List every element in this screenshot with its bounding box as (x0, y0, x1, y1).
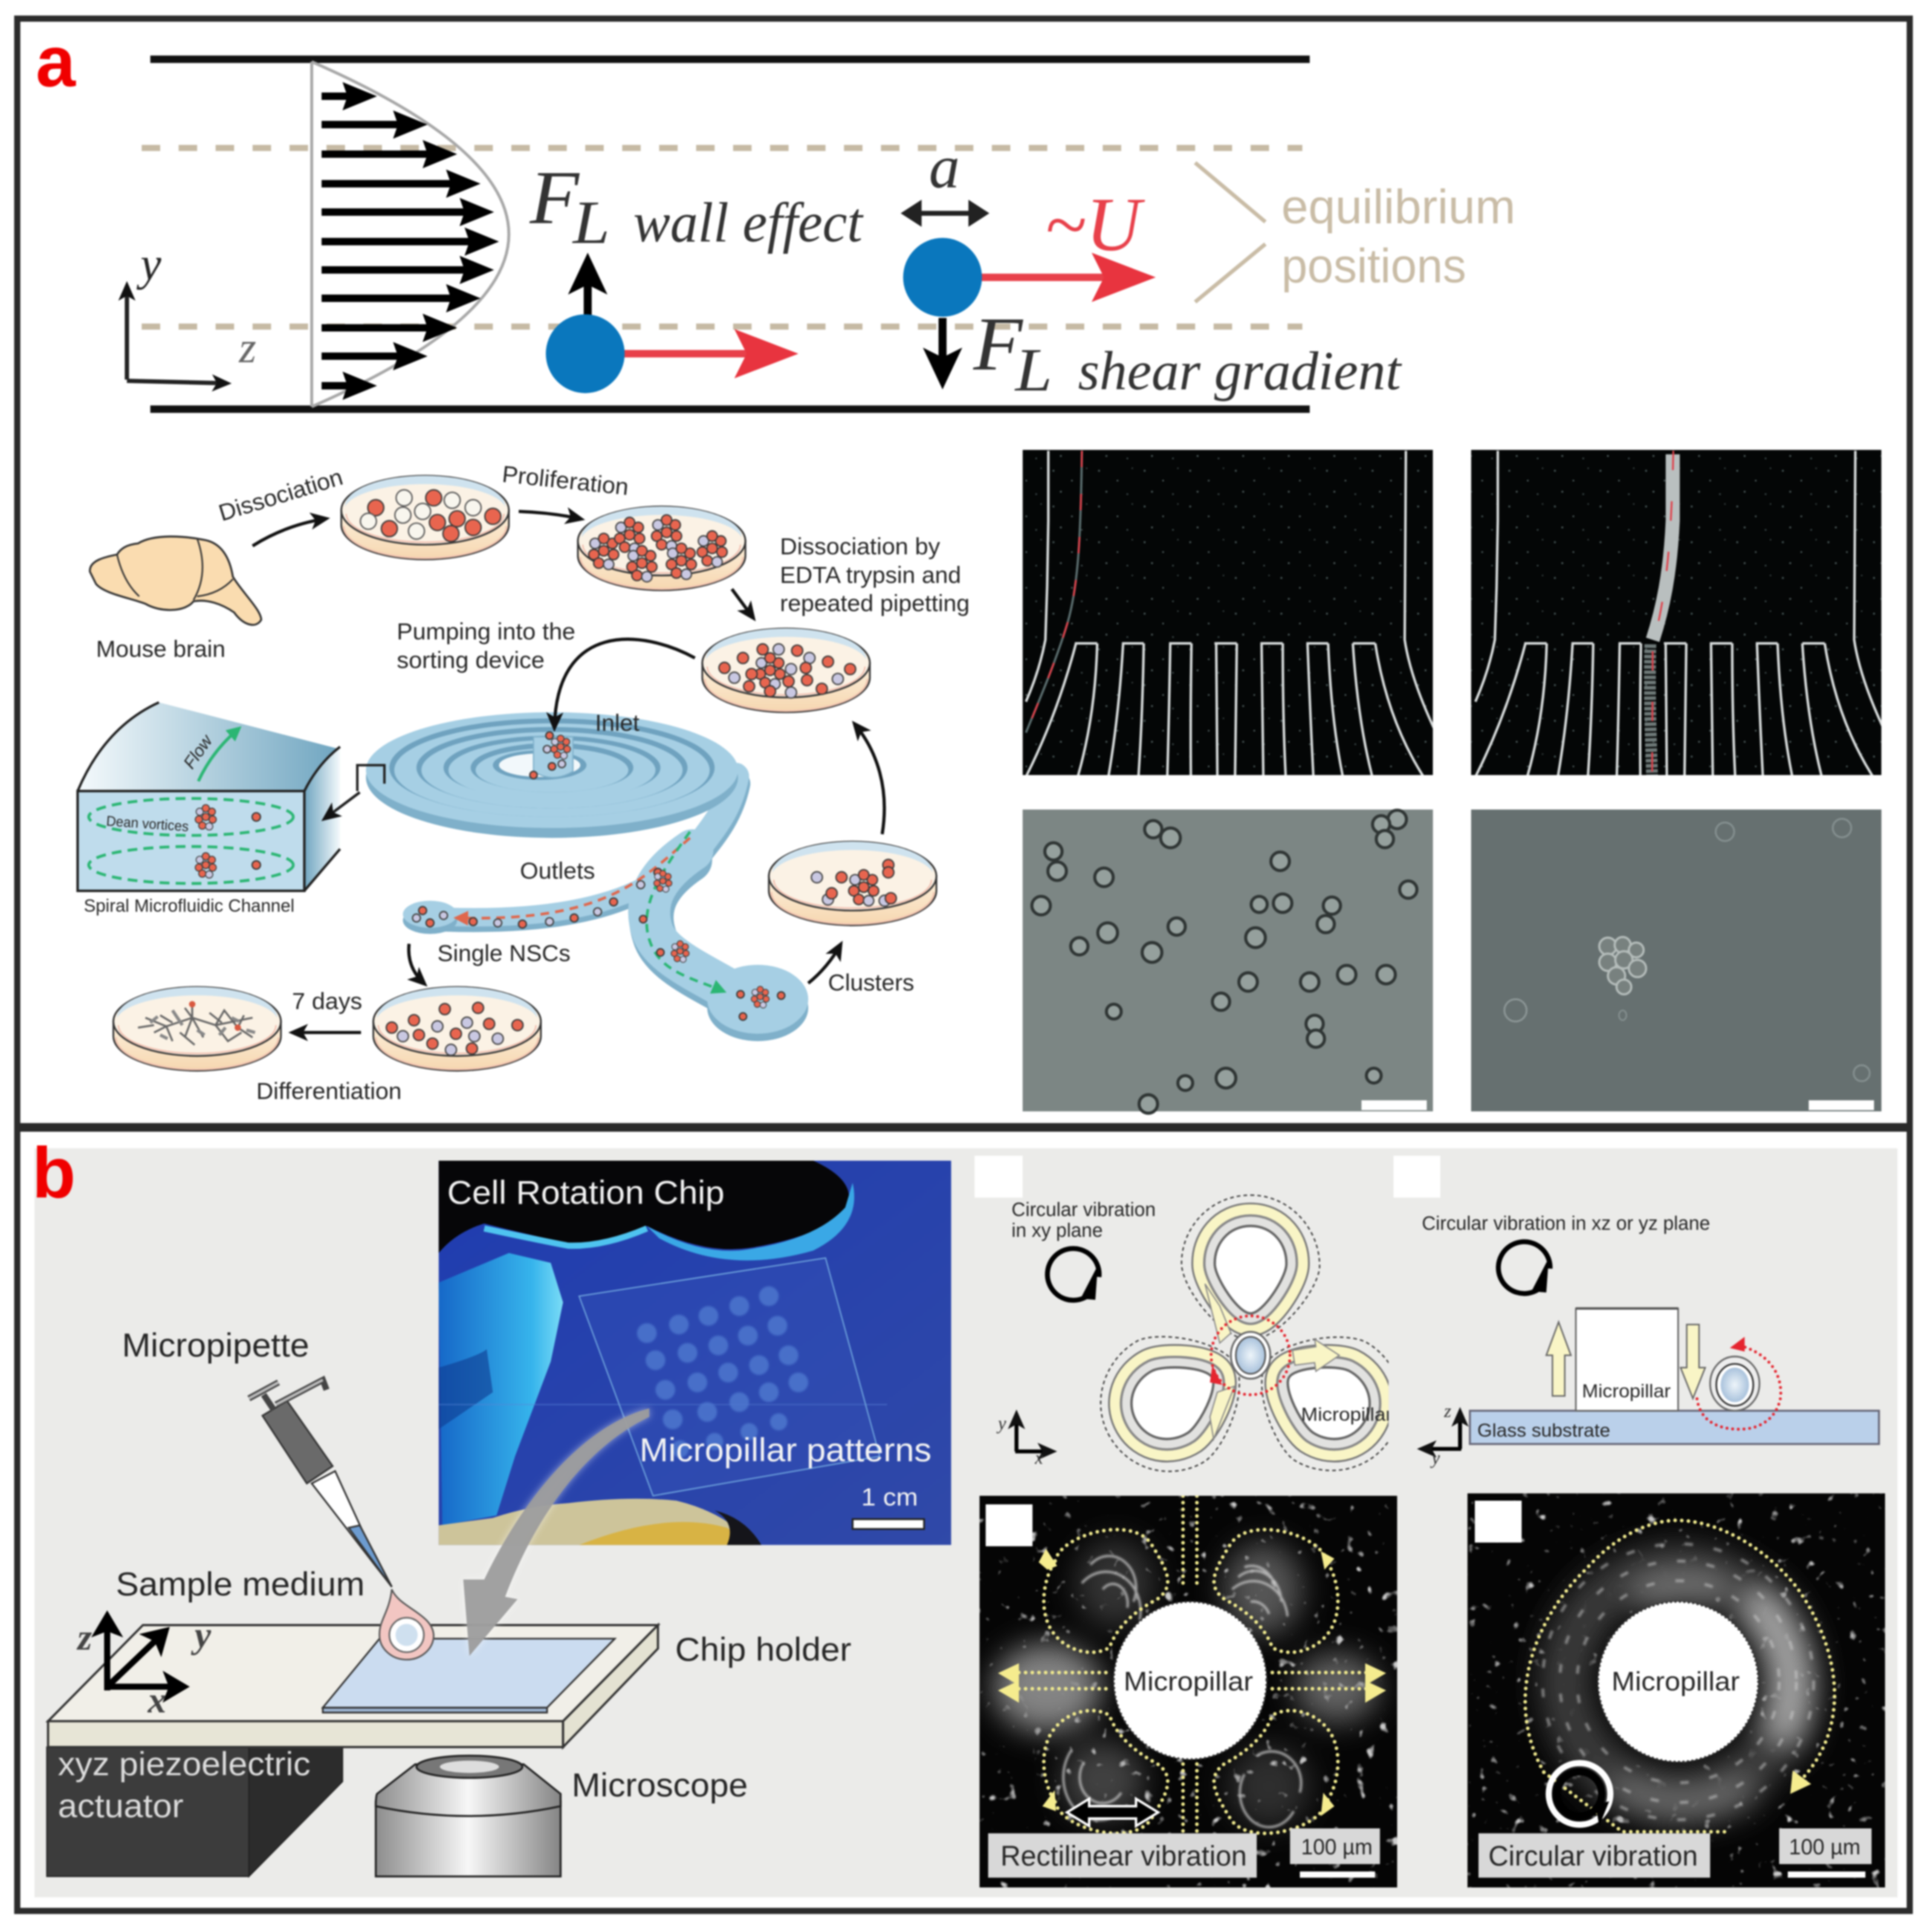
cross-section of the spiral channel: Dean vortices (106, 814, 190, 835)
axis letters: z (239, 323, 256, 372)
actuator: actuator (58, 1788, 184, 1825)
force labels (529, 132, 1402, 404)
workflow labels: Inlet (595, 709, 640, 736)
workflow labels: Dissociation by (780, 533, 940, 560)
chip holder (48, 1625, 658, 1747)
inlet cylinder with cells (530, 732, 573, 779)
cross-section of the spiral channel (77, 702, 340, 891)
workflow labels: repeated pipetting (780, 590, 970, 617)
axis letters (136, 239, 256, 372)
culture dish: single neural stem cells (373, 987, 541, 1071)
setup labels: Micropipette (122, 1327, 309, 1364)
scale label and bar: 100 µm (1301, 1835, 1373, 1859)
vibration label: Circular vibration (1489, 1840, 1698, 1872)
description text: in xy plane (1011, 1221, 1103, 1242)
micropillar array (637, 1286, 809, 1458)
vibration label: Rectilinear vibration (1000, 1840, 1247, 1872)
setup labels: Microscope (571, 1766, 748, 1803)
vibration label (1479, 1833, 1710, 1878)
xy axes (1015, 1414, 1052, 1451)
workflow labels: Proliferation (501, 461, 630, 500)
yz axes (1422, 1412, 1461, 1449)
vibration label (988, 1833, 1257, 1878)
pillar (1598, 1601, 1758, 1762)
workflow labels: Dissociation (216, 463, 346, 526)
photo labels (447, 1174, 931, 1511)
yellow dotted flow (1019, 1496, 1369, 1833)
yellow dotted flow (1525, 1520, 1835, 1832)
workflow labels: 7 days (292, 988, 362, 1014)
scale bar (1809, 1100, 1874, 1110)
culture dish: dissociated mixture (702, 629, 869, 712)
chip outline (579, 1258, 880, 1496)
cross-section of the spiral channel: Flow (179, 730, 217, 772)
workflow labels: Pumping into the (397, 618, 575, 645)
workflow labels: EDTA trypsin and (780, 561, 961, 588)
scale label and bar (1290, 1829, 1380, 1878)
pillar (1114, 1601, 1266, 1760)
coordinate axes (127, 286, 227, 383)
force labels: F (529, 155, 580, 240)
micrograph: cell cluster brightfield (1471, 809, 1882, 1112)
callout square and arrow to cross-section (326, 765, 384, 818)
photo scale bar (852, 1519, 924, 1529)
panel a label: a (36, 22, 77, 102)
equilibrium positions callout: positions (1281, 239, 1466, 293)
culture dish: neurospheres (578, 507, 745, 590)
micrograph: fluorescence streak near wall (1023, 450, 1437, 777)
equilibrium positions callout (1195, 163, 1515, 302)
glass substrate (1470, 1411, 1879, 1444)
blue particles (545, 238, 982, 393)
workflow labels: Differentiation (256, 1077, 401, 1104)
rotation icon (1491, 1234, 1558, 1301)
trefoil micropillars: Micropillar (1301, 1404, 1392, 1425)
scale label and bar: 100 µm (1789, 1835, 1860, 1859)
axis letters: z (1443, 1401, 1451, 1422)
yellow streaming arrows (1292, 1339, 1339, 1371)
icon: mouse brain (90, 537, 261, 625)
microscope objective (376, 1756, 560, 1876)
culture dish: differentiated neurons (114, 987, 281, 1071)
photo labels: Cell Rotation Chip (447, 1174, 725, 1211)
workflow labels: Outlets (520, 857, 595, 884)
force labels: L (572, 188, 610, 256)
photo labels: 1 cm (861, 1484, 918, 1511)
curved grey arrow (463, 1408, 650, 1656)
labels: Micropillar (1582, 1381, 1671, 1401)
axis letters (76, 1615, 212, 1721)
panel b label: b (32, 1134, 76, 1213)
micrograph: single cells brightfield (1023, 809, 1433, 1113)
experimental setup schematic (47, 1327, 852, 1876)
annular streaming glow (1565, 1569, 1792, 1807)
scale label and bar (1779, 1829, 1871, 1878)
workflow labels: Clusters (828, 969, 914, 996)
force labels: a (929, 132, 960, 201)
hand and glove shapes (438, 1161, 849, 1253)
micrograph: rectilinear vibration streaming (979, 1496, 1397, 1887)
channel walls (150, 59, 1309, 409)
workflow labels: sorting device (397, 646, 545, 673)
flow arrowhead (1790, 1771, 1811, 1794)
spiral rings (366, 712, 738, 838)
blank label patch (1475, 1501, 1522, 1543)
black force arrows (588, 275, 942, 367)
rotation icon (1549, 1763, 1610, 1826)
setup labels (116, 1327, 852, 1803)
axis letters (996, 1413, 1043, 1468)
labels (1477, 1381, 1671, 1441)
vortex swirls (1063, 1556, 1301, 1827)
force labels: L (1014, 336, 1052, 404)
micrograph: fluorescence streak at centre (1471, 450, 1887, 778)
equilibrium positions callout: equilibrium (1281, 179, 1515, 233)
actuator (47, 1745, 343, 1876)
streaming glow (993, 1539, 1379, 1829)
xyz axes (105, 1620, 180, 1690)
outlet reservoirs (403, 901, 809, 1041)
yellow arrows (1547, 1322, 1706, 1398)
yellow flow arrowheads (998, 1549, 1386, 1816)
axis letters: x (147, 1680, 166, 1721)
force labels: wall effect (633, 192, 864, 254)
labels: Glass substrate (1477, 1420, 1610, 1441)
setup labels: Chip holder (676, 1631, 852, 1668)
velocity profile (311, 62, 509, 406)
vibration direction arrow (1067, 1799, 1158, 1826)
axis letters: y (136, 239, 161, 291)
blank label patch (985, 1505, 1032, 1546)
sample droplet (380, 1589, 434, 1659)
description text: Circular vibration (1011, 1200, 1156, 1221)
force labels: F (973, 302, 1023, 387)
axis letters: x (1034, 1448, 1043, 1468)
photo labels: Micropillar patterns (639, 1431, 931, 1468)
force labels: shear gradient (1078, 341, 1402, 402)
blank label patches (974, 1155, 1440, 1198)
axis letters: z (76, 1617, 92, 1658)
workflow labels: Single NSCs (438, 939, 571, 966)
bead with red path (1231, 1332, 1270, 1378)
description text (1011, 1200, 1156, 1242)
outlet channels (444, 777, 739, 1000)
axis letters: y (996, 1413, 1007, 1433)
micrograph: rectilinear vibration streaming: Micropillar (1124, 1666, 1253, 1696)
micropillar block (1575, 1309, 1678, 1411)
axis letters: y (191, 1615, 212, 1656)
photo: cell rotation chip (438, 1161, 951, 1545)
particle size arrow (901, 200, 989, 227)
culture dish: clusters (769, 842, 936, 925)
panel a: inertial focusing channel diagram (127, 59, 1515, 409)
spiral microfluidic device (366, 712, 809, 1041)
glass chip (323, 1638, 615, 1713)
velocity arrows (322, 97, 489, 386)
axis letters (1430, 1401, 1451, 1468)
panel a: neural stem cell sorting workflow (77, 461, 970, 1104)
bead with orbit (1697, 1337, 1781, 1429)
description text: Circular vibration in xz or yz plane (1422, 1213, 1710, 1234)
trefoil micropillars (1098, 1193, 1390, 1474)
diagram: circular vibration in xy plane (996, 1193, 1390, 1474)
setup labels: Sample medium (116, 1566, 365, 1603)
actuator: xyz piezoelectric (58, 1745, 311, 1783)
force labels: ~U (1045, 183, 1145, 268)
panel b background (34, 1148, 1897, 1897)
red velocity arrows (622, 277, 1141, 354)
workflow labels: Spiral Microfluidic Channel (84, 896, 294, 916)
culture dish: dissociated cells (341, 476, 509, 560)
diagram: circular vibration in xz or yz plane (1422, 1213, 1879, 1468)
workflow labels (84, 461, 970, 1104)
workflow labels: Mouse brain (96, 635, 225, 662)
cells and flow along outlets (412, 832, 785, 1020)
micrograph: circular vibration streaming (1468, 1494, 1885, 1887)
Dean vortices (88, 799, 294, 884)
equilibrium dashed lines (142, 148, 1302, 327)
micrograph: circular vibration streaming: Micropillar (1612, 1666, 1740, 1696)
rotation icon (1039, 1240, 1107, 1309)
scale bar (1361, 1100, 1427, 1110)
workflow arrows (253, 511, 884, 1033)
pipette (249, 1380, 392, 1587)
swirl streaks (1543, 1544, 1813, 1820)
axis letters: y (1430, 1448, 1441, 1468)
